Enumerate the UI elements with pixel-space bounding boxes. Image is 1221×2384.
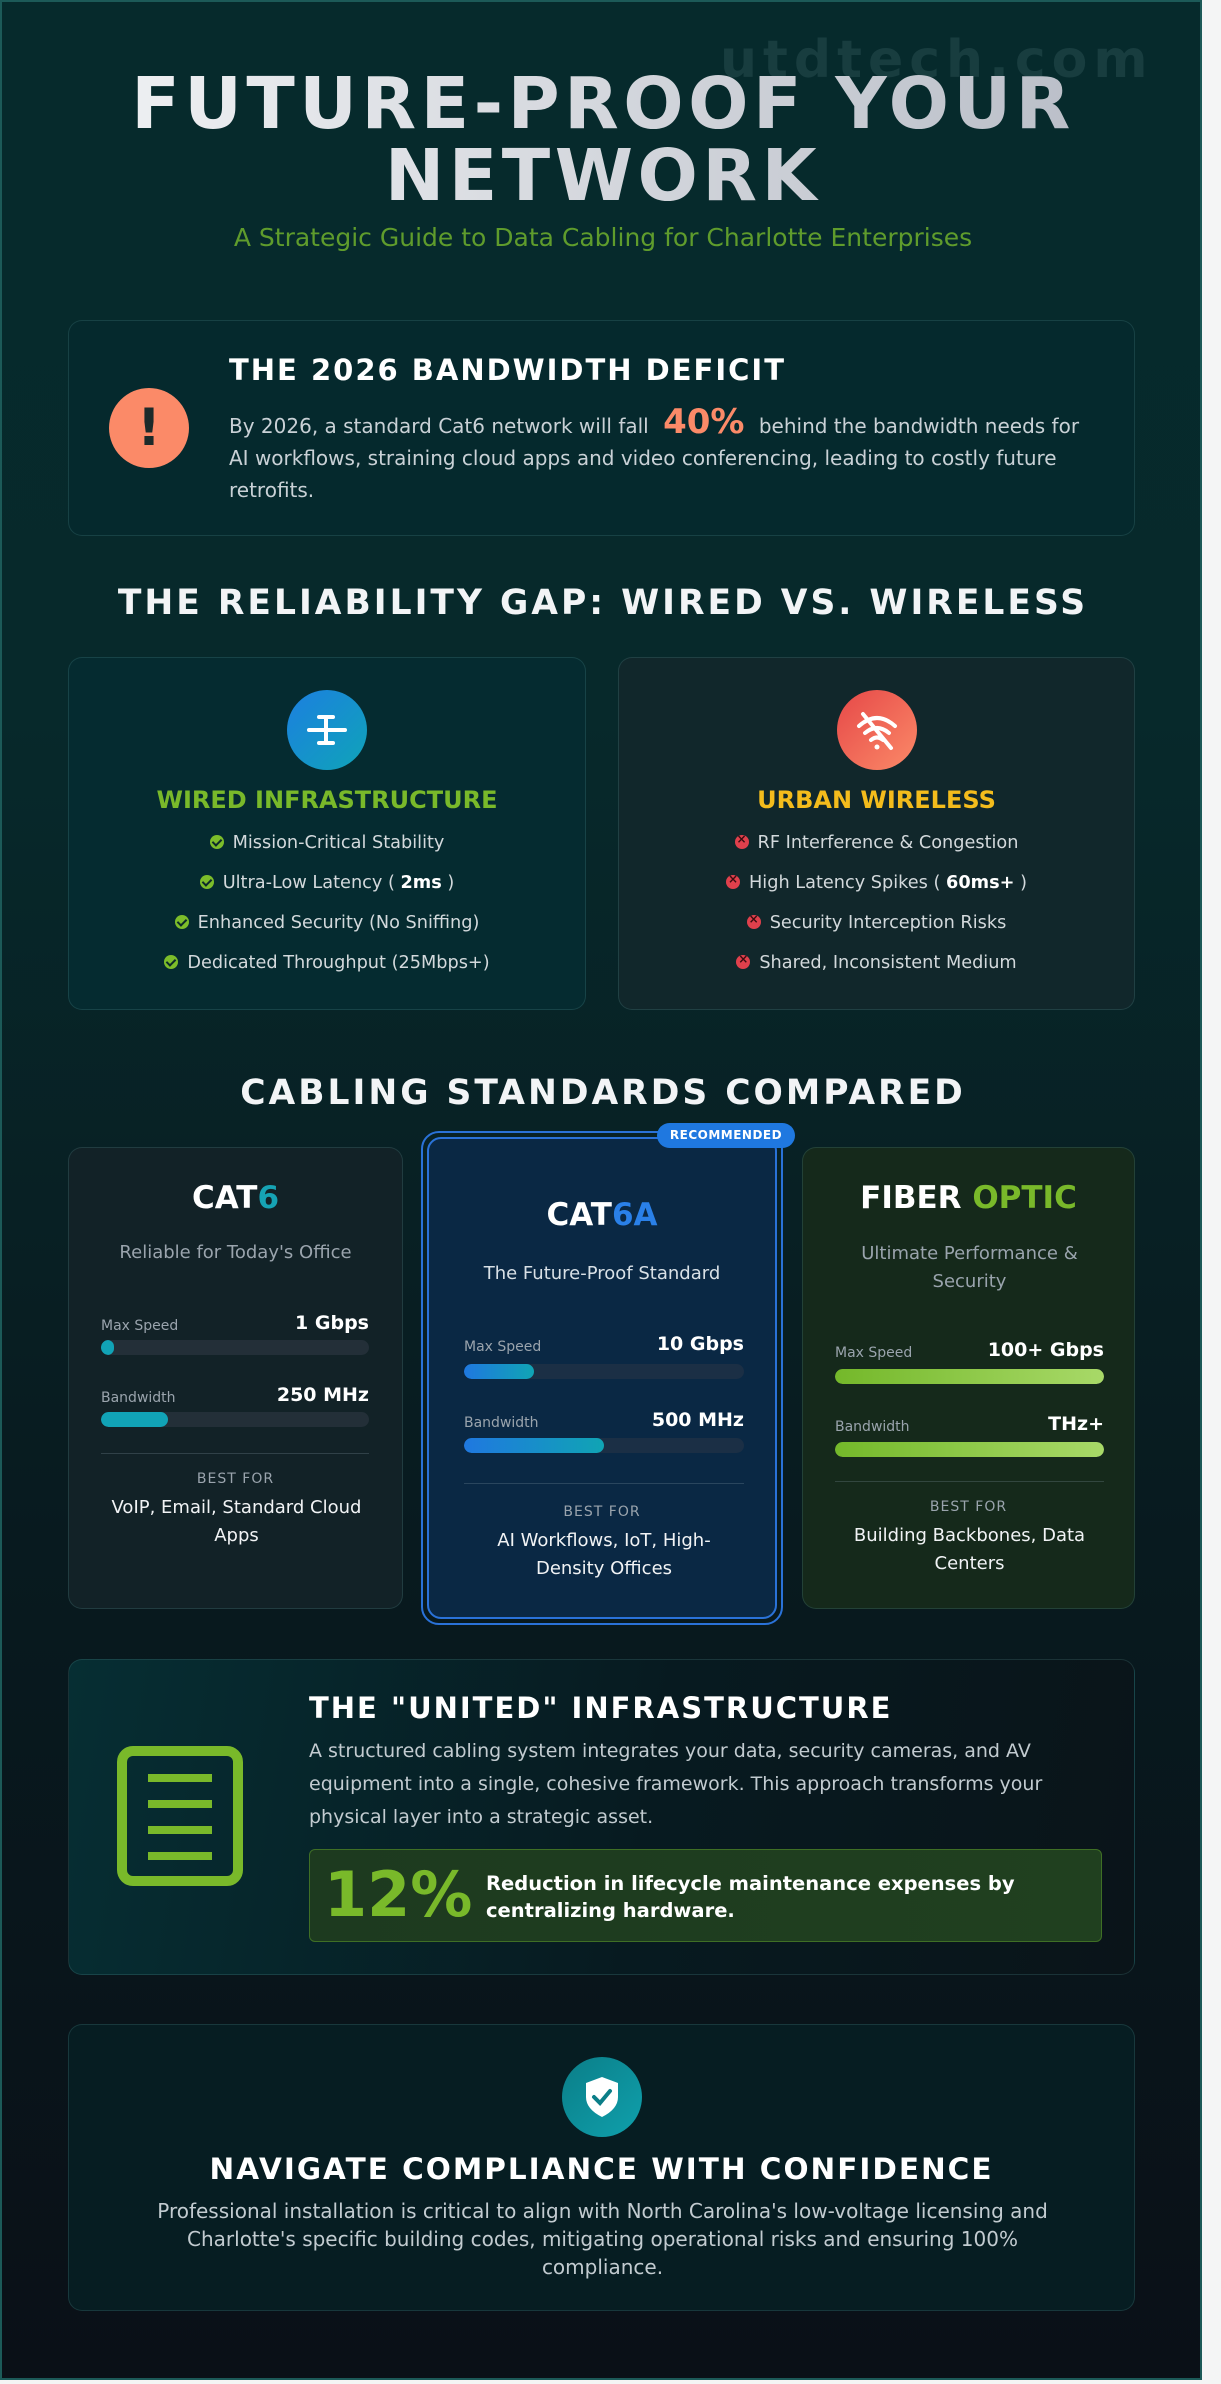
panel: wireless	[618, 657, 1135, 1010]
card: cat6: VoIP, Email, Standard Cloud Apps	[112, 1497, 361, 1546]
title: NETWORK	[385, 134, 821, 217]
icon: alert	[109, 388, 189, 468]
icon: alert: !	[137, 398, 161, 458]
title: cat6a: CAT6A	[546, 1197, 658, 1233]
best for: cat6: BEST FOR	[197, 1471, 274, 1487]
icon: wired	[287, 690, 367, 770]
panel: bandwidth deficit	[68, 320, 1135, 536]
list: wireless risks	[726, 833, 1027, 973]
bars: cat6a	[464, 1333, 744, 1453]
heading: united: THE "UNITED" INFRASTRUCTURE	[309, 1691, 892, 1725]
heading: compliance: NAVIGATE COMPLIANCE WITH CONFIDENCE	[210, 2152, 993, 2186]
title: cat6: CAT6	[192, 1180, 279, 1216]
title: FUTURE-PROOF YOUR	[131, 62, 1075, 145]
list: wired benefits: Enhanced Security (No Sniffing)	[198, 913, 479, 933]
list: wireless risks: RF Interference & Congestion	[758, 833, 1018, 853]
icon: document	[117, 1746, 243, 1886]
title: wireless: URBAN WIRELESS	[757, 786, 996, 814]
callout: 12%: Reduction in lifecycle maintenance expenses by centralizing hardware.	[486, 1872, 1015, 1922]
callout: 12%: 12%	[324, 1858, 472, 1931]
list: wireless risks: Shared, Inconsistent Medium	[759, 953, 1017, 973]
bars: cat6a: Max Speed	[464, 1339, 541, 1355]
card: fiber optic	[802, 1147, 1135, 1609]
title: wired: WIRED INFRASTRUCTURE	[156, 786, 498, 814]
bars: cat6a: Bandwidth	[464, 1415, 539, 1431]
bars: cat6: Bandwidth	[101, 1390, 176, 1406]
text: deficit body: By 2026, a standard Cat6 network will fall 40% behind the bandwidth needs for AI workflows, straining cloud apps and video conferencing, leading to costly future retrofits.	[229, 402, 1079, 502]
bars: cat6a: 500 MHz	[652, 1409, 744, 1431]
badge: recommended: RECOMMENDED	[670, 1128, 782, 1142]
heading: cabling standards: CABLING STANDARDS COMPARED	[240, 1073, 966, 1113]
card: fiber optic: Building Backbones, Data Centers	[854, 1525, 1085, 1574]
list: wireless risks: Security Interception Risks	[770, 913, 1006, 933]
callout: 12%	[309, 1849, 1102, 1942]
title: fiber: FIBER OPTIC	[860, 1180, 1077, 1216]
badge: recommended	[657, 1123, 795, 1148]
bars: cat6: 1 Gbps	[295, 1312, 369, 1334]
bars: fiber: 100+ Gbps	[988, 1339, 1104, 1361]
bars: fiber: THz+	[1048, 1413, 1104, 1435]
title	[2, 68, 1204, 212]
heading: reliability gap: THE RELIABILITY GAP: WIRED VS. WIRELESS	[118, 583, 1088, 623]
panel: wired	[68, 657, 586, 1010]
watermark: utdtech.com	[720, 30, 1154, 90]
icon: wifi off	[837, 690, 917, 770]
bars: fiber	[835, 1339, 1104, 1457]
heading: deficit: THE 2026 BANDWIDTH DEFICIT	[229, 353, 786, 387]
bars: cat6	[101, 1312, 369, 1427]
best for: fiber: BEST FOR	[930, 1499, 1007, 1515]
panel: compliance	[68, 2024, 1135, 2311]
card: cat6a recommended: AI Workflows, IoT, High-Density Offices	[497, 1530, 711, 1579]
card: cat6a recommended: The Future-Proof Standard	[484, 1263, 720, 1284]
bars: cat6: Max Speed	[101, 1318, 178, 1334]
bars: fiber: Bandwidth	[835, 1419, 910, 1435]
icon: shield	[562, 2057, 642, 2137]
list: wired benefits: Dedicated Throughput (25Mbps+)	[187, 953, 490, 973]
panel: united infrastructure	[68, 1659, 1135, 1975]
list: wired benefits	[164, 833, 490, 973]
best for: cat6a: BEST FOR	[563, 1504, 641, 1520]
card: fiber optic: Ultimate Performance & Security	[861, 1243, 1078, 1292]
subtitle: A Strategic Guide to Data Cabling for Charlotte Enterprises	[234, 223, 972, 252]
bars: cat6: 250 MHz	[277, 1384, 369, 1406]
card: cat6	[68, 1147, 403, 1609]
list: wired benefits: Ultra-Low Latency ( 2ms )	[223, 873, 454, 893]
bars: cat6a: 10 Gbps	[657, 1333, 744, 1355]
list: wired benefits: Mission-Critical Stability	[233, 833, 444, 853]
card: cat6a recommended	[421, 1131, 783, 1625]
text: compliance body: Professional installation is critical to align with North Carolina's low-voltage licensing and Charlotte's specific building codes, mitigating operational risks and ensuring 100% compliance.	[157, 2199, 1048, 2279]
list: wireless risks: High Latency Spikes ( 60ms+ )	[749, 873, 1027, 893]
card: cat6: Reliable for Today's Office	[119, 1242, 352, 1263]
bars: fiber: Max Speed	[835, 1345, 912, 1361]
text: united body: A structured cabling system integrates your data, security cameras, and AV equipment into a single, cohesive framework. This approach transforms your physical layer into a strategic asset.	[309, 1740, 1042, 1828]
